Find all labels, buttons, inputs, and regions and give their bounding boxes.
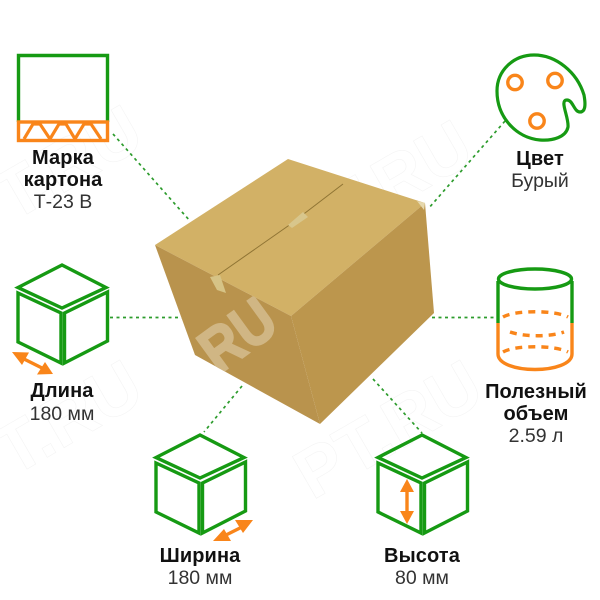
value: height: 80 мм bbox=[395, 567, 449, 589]
icon: cardboard section bbox=[18, 56, 108, 140]
value: width: 180 мм bbox=[168, 567, 232, 589]
panel: useful volume: объем bbox=[503, 403, 569, 425]
heading: width: Ширина bbox=[160, 545, 241, 567]
icon: cube with length arrow bbox=[12, 265, 108, 374]
icon: palette bbox=[497, 55, 585, 140]
watermark bbox=[0, 90, 495, 514]
panel: useful volume bbox=[485, 269, 587, 447]
panel: cardboard grade: картона bbox=[24, 169, 103, 191]
panel: length bbox=[12, 265, 108, 425]
panel: width bbox=[156, 435, 253, 589]
value: useful volume: 2.59 л bbox=[509, 425, 563, 447]
heading: length: Длина bbox=[31, 380, 94, 402]
panel: colour bbox=[497, 55, 585, 192]
dashed connectors bbox=[110, 121, 505, 433]
box right face bbox=[291, 203, 434, 424]
value: colour: Бурый bbox=[511, 170, 569, 192]
icon: cylinder bbox=[498, 269, 572, 370]
box watermark: RU bbox=[186, 285, 290, 386]
heading: colour: Цвет bbox=[516, 148, 564, 170]
box flap seam and tape bbox=[210, 184, 425, 293]
heading: height: Высота bbox=[384, 545, 461, 567]
icon: cube with width arrow bbox=[156, 435, 253, 541]
box top face bbox=[155, 159, 425, 316]
box left face bbox=[155, 245, 320, 424]
watermark: PT.RU bbox=[281, 345, 495, 514]
watermark: PT.RU bbox=[271, 105, 485, 274]
icon: cube with height arrow bbox=[378, 435, 468, 533]
panel: height bbox=[378, 435, 468, 589]
value: length: 180 мм bbox=[30, 403, 94, 425]
heading: cardboard grade: Марка bbox=[32, 147, 95, 169]
cardboard box bbox=[155, 159, 434, 424]
value: cardboard grade: Т-23 В bbox=[34, 191, 92, 213]
heading: useful volume: Полезный bbox=[485, 381, 587, 403]
panel: cardboard grade bbox=[18, 56, 108, 213]
